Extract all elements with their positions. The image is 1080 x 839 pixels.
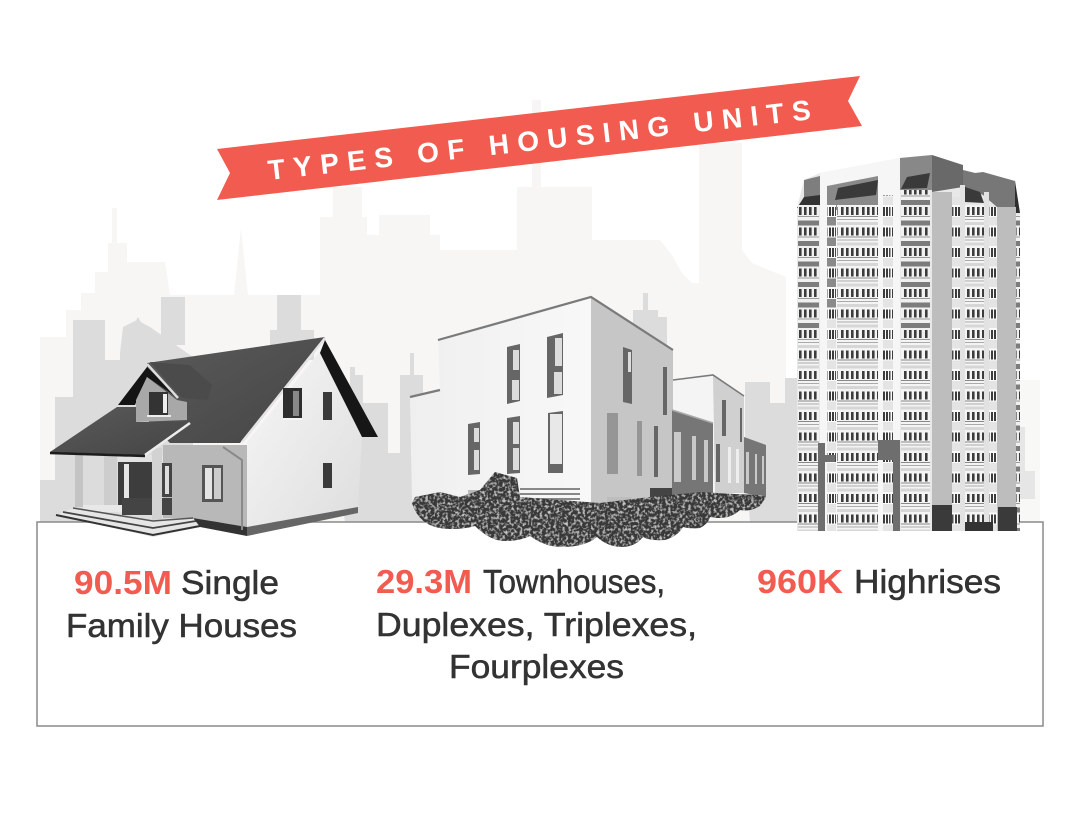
stat: townhouses, duplexes, triplexes, fourplexes: 29.3M (376, 563, 472, 600)
title banner (217, 76, 862, 200)
skyline background (40, 100, 1040, 522)
stat: townhouses, duplexes, triplexes, fourplexes: Fourplexes (449, 648, 624, 685)
stat: highrises: 960K (757, 563, 843, 600)
title banner: TYPES OF HOUSING UNITS (266, 94, 812, 186)
stat: highrises (757, 563, 1001, 600)
tower windows (827, 195, 997, 531)
stat: townhouses, duplexes, triplexes, fourplexes (376, 563, 697, 685)
house porch (75, 448, 172, 520)
stat: single family houses: 90.5M (74, 564, 172, 601)
tower walls (932, 192, 952, 531)
illustration: highrise tower (797, 155, 1020, 531)
tower dark accents (818, 440, 900, 531)
illustration: single family house (50, 337, 378, 537)
stat: single family houses: Family Houses (66, 607, 297, 644)
hedge (412, 472, 766, 547)
fence (520, 488, 580, 505)
townhouse windows (468, 333, 742, 482)
tower balconies (798, 190, 1020, 531)
stat: single family houses: Single (181, 564, 279, 601)
stat: townhouses, duplexes, triplexes, fourplexes: Townhouses, (483, 563, 665, 600)
stat: townhouses, duplexes, triplexes, fourplexes: Duplexes, Triplexes, (376, 606, 697, 643)
stats panel box (37, 522, 1043, 726)
stat: single family houses (66, 564, 297, 644)
illustration: townhouses (410, 297, 766, 547)
stat: highrises: Highrises (854, 563, 1001, 600)
top of tower (797, 155, 1020, 531)
